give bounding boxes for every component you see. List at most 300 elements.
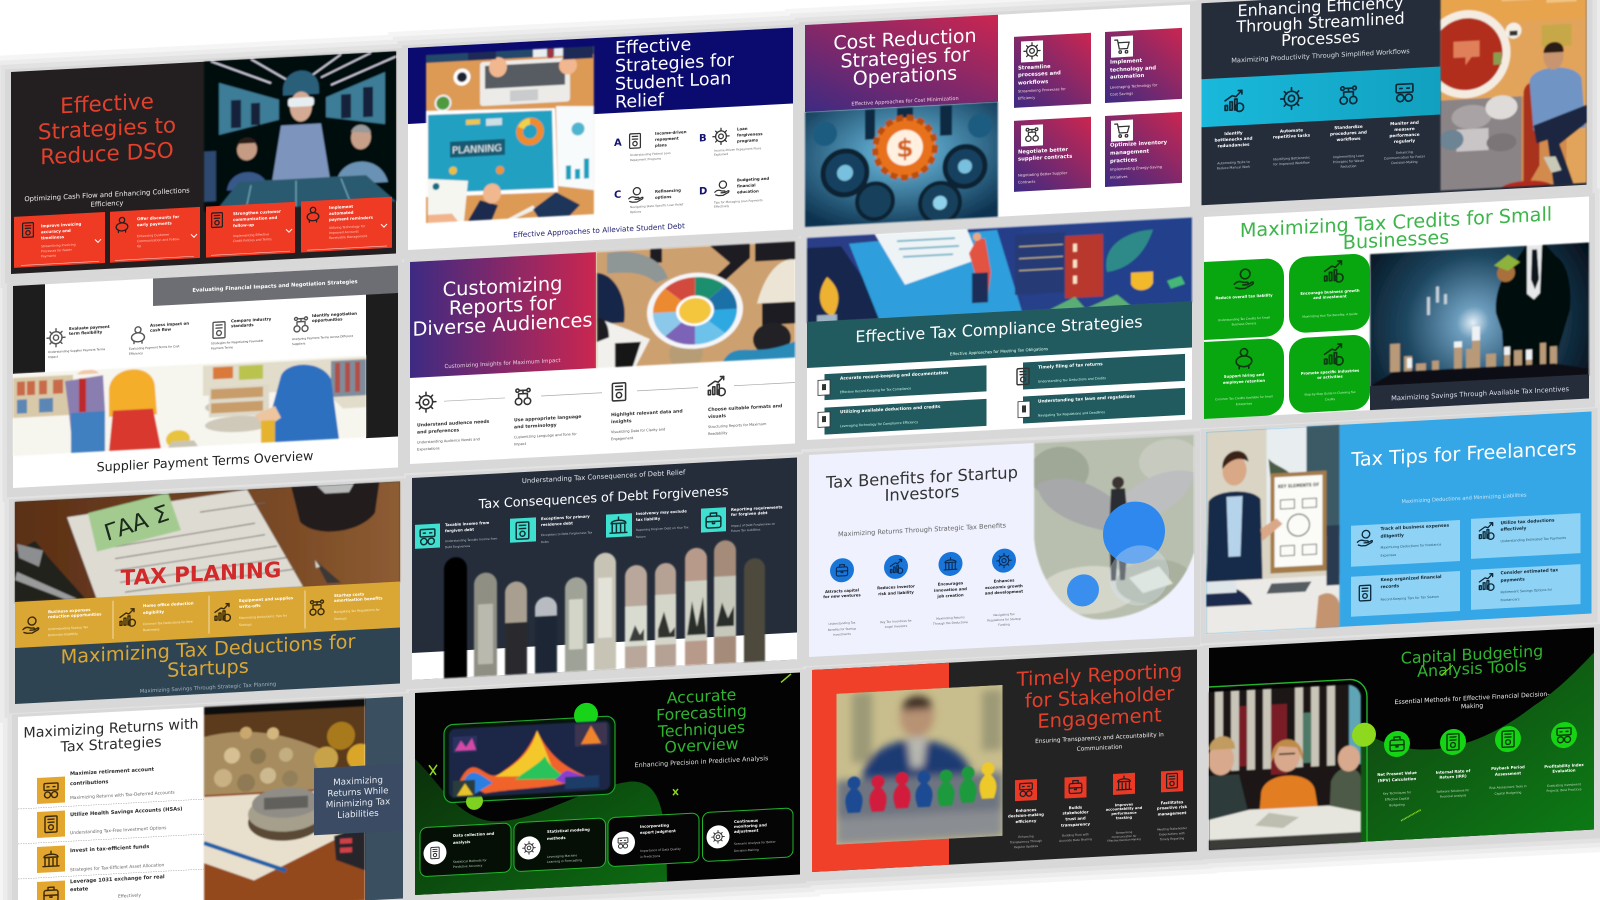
card 2: early payments (137, 220, 172, 227)
column 4: Funding (998, 622, 1010, 627)
monitor frame (444, 716, 615, 803)
column 2: trust and (1065, 815, 1086, 821)
card 4: Improved Accounts (329, 229, 359, 235)
card 4: management (1110, 149, 1150, 157)
card 4: practices (1110, 157, 1137, 165)
title: Tax Benefits for Startup (825, 463, 1018, 492)
item D: D (699, 186, 707, 197)
card 4: Freelancers (1500, 597, 1520, 602)
card 4: Scenario Analysis for Better (734, 840, 776, 846)
item 2 (18, 799, 204, 839)
card 3: Enterprises (1236, 401, 1253, 406)
slide: Enhancing Efficiency (1202, 0, 1586, 205)
image: winged figure (1029, 434, 1199, 625)
column 1: Benefits for Startup (828, 626, 856, 632)
header text: Evaluating Financial Impacts and Negotiation Strategies (192, 279, 358, 294)
sticky note text: ΓΑΑ Σ (101, 501, 172, 547)
title: for Stakeholder (1025, 682, 1175, 713)
card 3 (608, 813, 699, 867)
column 3: Maximizing Returns (936, 615, 965, 621)
title: Relief (615, 90, 665, 113)
column 2 (129, 321, 189, 356)
title: Overview (665, 734, 739, 757)
card 2: Communication and Follow- (137, 237, 180, 243)
column 2: Assess impact on (150, 321, 189, 328)
item 3: Maximizing Deductions: Tips for (239, 613, 288, 620)
item 3: Return (636, 535, 646, 539)
column 1: Net Present Value (1377, 770, 1417, 777)
image headline: TAX PLANING (121, 558, 281, 591)
item C: C (614, 190, 621, 201)
title: Tax Strategies (59, 734, 162, 756)
left black strip (13, 284, 45, 374)
column 4: management (1158, 810, 1187, 817)
card 3: Importance of Data Quality (640, 847, 681, 853)
title: Cost Reduction (833, 25, 977, 54)
caption band (1370, 374, 1589, 410)
column 3: Visualizing Data for Clarity and (611, 427, 665, 434)
slide: Maximizing Tax Deductions for Startups (15, 476, 400, 704)
card 1 (1204, 258, 1284, 340)
card 1: Predictive Accuracy (453, 863, 483, 869)
title: Strategies for (840, 44, 970, 73)
card 3: Negotiate better (1018, 147, 1068, 156)
card 2: Understanding Estimated Tax Payments (1500, 536, 1566, 543)
column 3: tracking (1116, 815, 1133, 820)
item 4 (701, 504, 783, 535)
item 1 (415, 519, 498, 551)
item 1: Understanding Startup Tax (48, 625, 88, 631)
column 2: Key Tax Incentives for (880, 618, 913, 624)
card 3: Negotiating Better Supplier (1018, 171, 1068, 178)
icon: piggy (116, 217, 128, 233)
column 2: Building Trust with (1062, 832, 1089, 838)
column 1: Transparency Through (1009, 839, 1042, 845)
card 4: Promote specific industries (1301, 368, 1360, 376)
column 3: Reduction (1341, 164, 1356, 169)
item D: Tips for Managing Loan Payments (713, 198, 763, 205)
title: Effective (615, 35, 691, 59)
item 4 (18, 869, 204, 900)
image: pawns and businessman (836, 685, 1002, 845)
column 1: Automating Tasks to (1217, 160, 1250, 165)
title: Effective Tax Compliance Strategies (855, 312, 1143, 346)
column 4: Evaluating Investment (1547, 782, 1582, 788)
card 4: Utilizing Technology for (329, 224, 366, 230)
card 2: methods (547, 835, 566, 841)
item C (614, 185, 684, 215)
column 1: Understanding Audience Needs and (417, 437, 480, 445)
slide: Supplier Payment Terms Overview (13, 265, 398, 488)
column 4: visuals (708, 413, 726, 420)
column 3 (1106, 772, 1143, 843)
icon: chess (1021, 124, 1043, 146)
slide: Effective Strategies to Reduce DSO (11, 51, 396, 274)
green blob (415, 746, 667, 895)
column 4: Timely Reporting (1159, 836, 1184, 842)
column 3: Assessment (1495, 770, 1521, 777)
callout: Returns While (327, 786, 389, 800)
column 2 (877, 554, 915, 629)
bar 4 (1018, 388, 1185, 424)
bar 2 (818, 399, 986, 435)
card 1: workflows (1018, 79, 1048, 87)
image: futuristic meeting (204, 51, 396, 212)
item 4: amortization benefits (334, 595, 383, 603)
item 4: estate (70, 886, 89, 893)
card 4: Step-by-Step Guide to Claiming Tax (1304, 390, 1356, 397)
column 3: job creation (936, 592, 964, 599)
subtitle: Maximizing Productivity Through Simplified Workflows (1231, 47, 1410, 65)
column 4: Projects: Best Practices (1547, 787, 1582, 793)
slide: Capital Budgeting Analysis Tools (1208, 627, 1594, 850)
sparkle corner (781, 674, 791, 682)
column 3: accountability and (1106, 806, 1143, 812)
column 1: Understanding Tax (829, 621, 856, 626)
card 1: analysis (453, 839, 471, 845)
item 2: Utilize Health Savings Accounts (HSAs) (70, 806, 182, 818)
slide: Effective Strategies for Student Loan Relief (408, 27, 793, 250)
green dot top (574, 702, 598, 728)
card 2 (1289, 253, 1370, 333)
slide: Maximizing Returns with Tax Strategies (18, 696, 403, 900)
bar 3: Timely filing of tax returns (1038, 361, 1103, 371)
icon: basket (1111, 120, 1133, 142)
item D: Effectively (714, 204, 729, 209)
item 1: Business expenses (48, 607, 91, 614)
slide: Cost Reduction Strategies (805, 4, 1190, 230)
subtitle: Effective Approaches for Meeting Tax Obligations (950, 346, 1048, 356)
column 3: Through Tax Deductions (932, 620, 968, 626)
card 2: effectively (1500, 525, 1527, 533)
title: Maximizing Returns with (23, 716, 199, 742)
item 2: Exceptions for primary (541, 513, 590, 521)
bar 2: Utilizing available deductions and credits (840, 404, 941, 415)
card 2: Cost Savings (1110, 92, 1133, 97)
column 3: Implementing Lean (1333, 154, 1364, 159)
card 1: processes and (1018, 70, 1061, 79)
card 2: and investment (1313, 293, 1347, 300)
item D: Budgeting and (737, 176, 769, 182)
column 1 (1215, 90, 1252, 171)
item 3 (18, 834, 204, 876)
column 4 (1157, 770, 1188, 842)
subtitle: Effective Approaches for Cost Minimization (851, 96, 959, 108)
title: Reports for (449, 291, 556, 320)
title: Forecasting (656, 701, 747, 725)
card 3 (1014, 117, 1091, 192)
item 1: Taxable income from (445, 520, 489, 527)
column 1: Enhances (1016, 807, 1037, 813)
item 3 (209, 591, 294, 634)
title: Tax Consequences of Debt Forgiveness (478, 484, 729, 512)
card 1: Improve invoicing (41, 221, 81, 228)
green dot bottom (466, 792, 483, 810)
column 2: Automate (1280, 127, 1303, 134)
item A: plans (655, 142, 668, 148)
image: collage and man (1422, 0, 1586, 192)
item 4: Leverage 1031 exchange for real (70, 874, 165, 885)
column 4: Identify negotiation (312, 311, 357, 318)
card 4: Receivable Management (329, 234, 368, 240)
column 1: Impact (48, 355, 59, 359)
card 3: communication and (233, 215, 277, 222)
subtitle: Making (1461, 702, 1483, 711)
item A: Repayment Programs (630, 156, 662, 162)
squiggle bottom (1401, 810, 1421, 821)
card 2: Statistical modeling (547, 827, 590, 834)
item 4: Navigating Tax Regulations for (334, 608, 381, 614)
title: Engagement (1037, 703, 1162, 733)
item 4 (305, 586, 383, 629)
title: Diverse Audiences (412, 308, 593, 341)
card 2: Leveraging Machine (547, 853, 577, 859)
column 2: Identifying Bottlenecks (1273, 156, 1310, 161)
card 2: technology and (1110, 65, 1156, 74)
card 1: Maximizing Deductions for Freelance (1380, 542, 1441, 550)
icon (818, 380, 830, 395)
header band (408, 27, 793, 124)
item 3 (606, 508, 689, 541)
column 2: for Improved Workflow (1273, 161, 1310, 166)
column 2: Evaluating Payment Terms for Cost (129, 344, 180, 351)
title: Investors (885, 482, 959, 505)
column 2: Builds (1069, 805, 1083, 810)
column 2: Return (IRR) (1439, 773, 1467, 780)
card 1: Processes for Faster (41, 248, 73, 253)
slide: Accurate Forecasting Techniques Overview (415, 672, 800, 895)
subtitle: Communication (1077, 744, 1123, 753)
card 4: Optimize inventory (1110, 140, 1168, 149)
column 2: risk and liability (878, 589, 914, 596)
card 1: Efficiency (1018, 96, 1036, 101)
item 1: Deduction Eligibility (48, 632, 78, 637)
image: cartoon supermarket (13, 355, 366, 457)
column 4: Enhances (994, 578, 1015, 584)
card 3: Contracts (1018, 180, 1035, 185)
column 2: Use appropriate language (514, 414, 581, 423)
card 1: Expenses (1380, 553, 1396, 558)
card 4 (1471, 564, 1580, 610)
column 2: cash flow (150, 327, 171, 333)
card 1: Understanding Tax Credits for Small (1218, 315, 1270, 322)
icon: cart (1111, 36, 1133, 58)
right strip (365, 696, 403, 900)
column 4: measure (1394, 126, 1415, 132)
column 3: Payback Period (1491, 764, 1525, 771)
card 3: follow-up (233, 222, 254, 228)
footer title: Supplier Payment Terms Overview (97, 448, 313, 475)
caption: Maximizing Savings Through Available Tax Incentives (1391, 385, 1569, 403)
bar 1: Effective Record-Keeping for Tax Compliance (840, 386, 911, 394)
item 2: Common Tax Deductions for New (143, 619, 193, 626)
item C: Refinancing (655, 187, 681, 194)
icon: gear head (1021, 40, 1043, 62)
card 3: records (1380, 583, 1400, 590)
item 1: reduction opportunities (48, 611, 102, 619)
item 1: contributions (70, 779, 108, 787)
column 4: Choose suitable formats and (708, 403, 782, 413)
squiggle title (1441, 665, 1453, 676)
column 4: Meeting Stakeholder (1157, 826, 1188, 832)
item B: forgiveness (737, 131, 763, 137)
column 3: Communication for (1112, 834, 1137, 839)
card 4: Decision-Making (734, 848, 759, 853)
card 1 (1014, 33, 1091, 108)
title: Strategies for (615, 51, 735, 77)
item 3: Insolvency may exclude (636, 508, 687, 516)
subtitle: Maximizing Savings Through Strategic Tax Planning (140, 682, 276, 695)
item D (699, 176, 769, 209)
item 4: Effectively (118, 892, 141, 900)
sparkle right (673, 789, 678, 795)
column 3 (611, 380, 683, 441)
column 4: Analyzing Payment Terms Across Different (292, 334, 354, 341)
item 1: Understanding Taxable Income from (445, 536, 498, 543)
item 4: for forgiven debt (731, 510, 768, 517)
item 4: Startups (334, 616, 347, 621)
column 1: Identify (1224, 130, 1243, 136)
card 1: Statistical Methods for (453, 858, 487, 864)
callout: Liabilities (337, 809, 379, 821)
icon: gear (713, 128, 729, 145)
subtitle: Optimizing Cash Flow and Enhancing Collections (24, 186, 190, 203)
card 3: Strengthen customer (233, 209, 281, 216)
column 1: for new ventures (823, 592, 861, 599)
item A (614, 129, 687, 163)
item 1 (37, 766, 175, 804)
column 1: Enhancing (1018, 834, 1034, 839)
card 4 (1289, 334, 1370, 413)
item D: education (737, 188, 759, 194)
image: planning desk: PLANNING (452, 143, 502, 157)
item B: B (699, 133, 707, 144)
image: team analysing plans (1208, 684, 1361, 850)
column 4: regularly (1394, 138, 1415, 144)
column 4: Decision-Making (1391, 160, 1418, 165)
item 1 (23, 606, 102, 639)
title: Techniques (657, 717, 745, 741)
callout (314, 763, 403, 835)
card 3 (206, 202, 295, 258)
card 1: Business Owners (1232, 321, 1257, 327)
image: gears (805, 102, 998, 230)
column 3: Highlight relevant data and (611, 408, 683, 418)
column 2 (1059, 776, 1092, 843)
image: rainbow data chart (449, 721, 610, 798)
column 2 (1436, 728, 1471, 799)
card 3: in Predictions (640, 854, 661, 859)
column 2: Software Solutions for (1436, 788, 1470, 794)
item 1: Maximize retirement account (70, 767, 155, 777)
card 1: timeliness (41, 234, 65, 240)
title: Capital Budgeting (1401, 641, 1543, 668)
subtitle: Ensuring Transparency and Accountability in (1035, 732, 1164, 745)
card 2 (110, 207, 200, 263)
item 3: tax liability (636, 516, 661, 522)
glass circle (1109, 544, 1169, 607)
card 4: monitoring and (734, 822, 767, 829)
item C: options (655, 194, 672, 200)
slide: Timely Reporting for Stakeholder Engagement (812, 649, 1197, 872)
image: coins and calculator (204, 698, 373, 900)
column 2: Financial Analysis (1440, 793, 1467, 799)
item 4: Reporting requirements (731, 504, 783, 512)
title: Tax Tips for Freelancers (1350, 436, 1577, 471)
slide: Effective Tax Compliance Strategies (807, 217, 1192, 440)
bar 1: Accurate record-keeping and documentation (840, 370, 948, 382)
column 3 (1489, 725, 1527, 796)
column 3: Streamlining (1116, 830, 1133, 835)
header band (153, 265, 398, 306)
item A: Income-driven (655, 129, 687, 136)
bar 3 (1017, 354, 1185, 390)
slide: Tax Tips for Freelancers (1206, 411, 1592, 634)
column 3: workflows (1337, 136, 1361, 142)
column 1: decision-making (1008, 812, 1044, 819)
card 3: Support hiring and (1224, 372, 1264, 379)
item A: A (614, 138, 622, 149)
card 1: Streamline (1018, 64, 1051, 72)
column 2 (1273, 87, 1311, 166)
image: arches (444, 538, 765, 678)
card 3: expert judgment (640, 828, 676, 835)
card 4: Retirement Savings Options for (1500, 588, 1553, 594)
red strip (812, 663, 949, 872)
card 2: Learning in Forecasting (547, 858, 582, 864)
card 1: accuracy and (41, 228, 71, 234)
card 4: Credits (1325, 397, 1336, 402)
card 4 (301, 197, 392, 253)
card 4 (1105, 112, 1182, 187)
column 1: Understanding Supplier Payment Terms (48, 347, 106, 354)
item B: Explained (714, 152, 728, 157)
item 2: residence debt (541, 520, 573, 527)
item A: repayment (655, 136, 679, 142)
column 1 (823, 557, 861, 637)
item 3: Startups (239, 622, 252, 627)
column 4 (1384, 83, 1426, 166)
bar 1 (818, 365, 986, 400)
item 2: Exceptions to Debt Forgiveness Tax (541, 530, 593, 537)
column 4 (1544, 721, 1584, 793)
column 1: Expectations (417, 446, 440, 452)
column 3: innovation and (934, 586, 967, 593)
title: Effective (60, 89, 154, 119)
teal band (1202, 67, 1440, 127)
subtitle: Maximizing Returns Through Strategic Tax Benefits (838, 521, 1007, 538)
item 2: Home office deduction (143, 600, 194, 608)
title: Businesses (1343, 225, 1449, 254)
column 3: procedures and (1330, 129, 1367, 136)
small blue circle (1067, 574, 1099, 607)
column 4: Communication for Faster (1384, 154, 1426, 161)
slide: Tax Consequences of Debt Forgiveness (412, 457, 797, 680)
icon: book (630, 133, 640, 148)
column 1: term flexibility (69, 329, 103, 336)
title: Analysis Tools (1417, 656, 1527, 681)
column 1 (1008, 779, 1044, 850)
card 2: Utilize tax deductions (1500, 517, 1555, 526)
card 1: Data collection and (453, 831, 495, 838)
column 2: Customizing Language and Tone for (514, 432, 577, 439)
item 2: Businesses (143, 627, 160, 632)
card 4: adjustment (734, 828, 759, 834)
item 2: Rules (541, 540, 549, 544)
column 2: Internal Rate of (1436, 768, 1471, 775)
column 2: Angel Investors (885, 624, 908, 629)
column 1: bottlenecks and (1215, 136, 1252, 143)
